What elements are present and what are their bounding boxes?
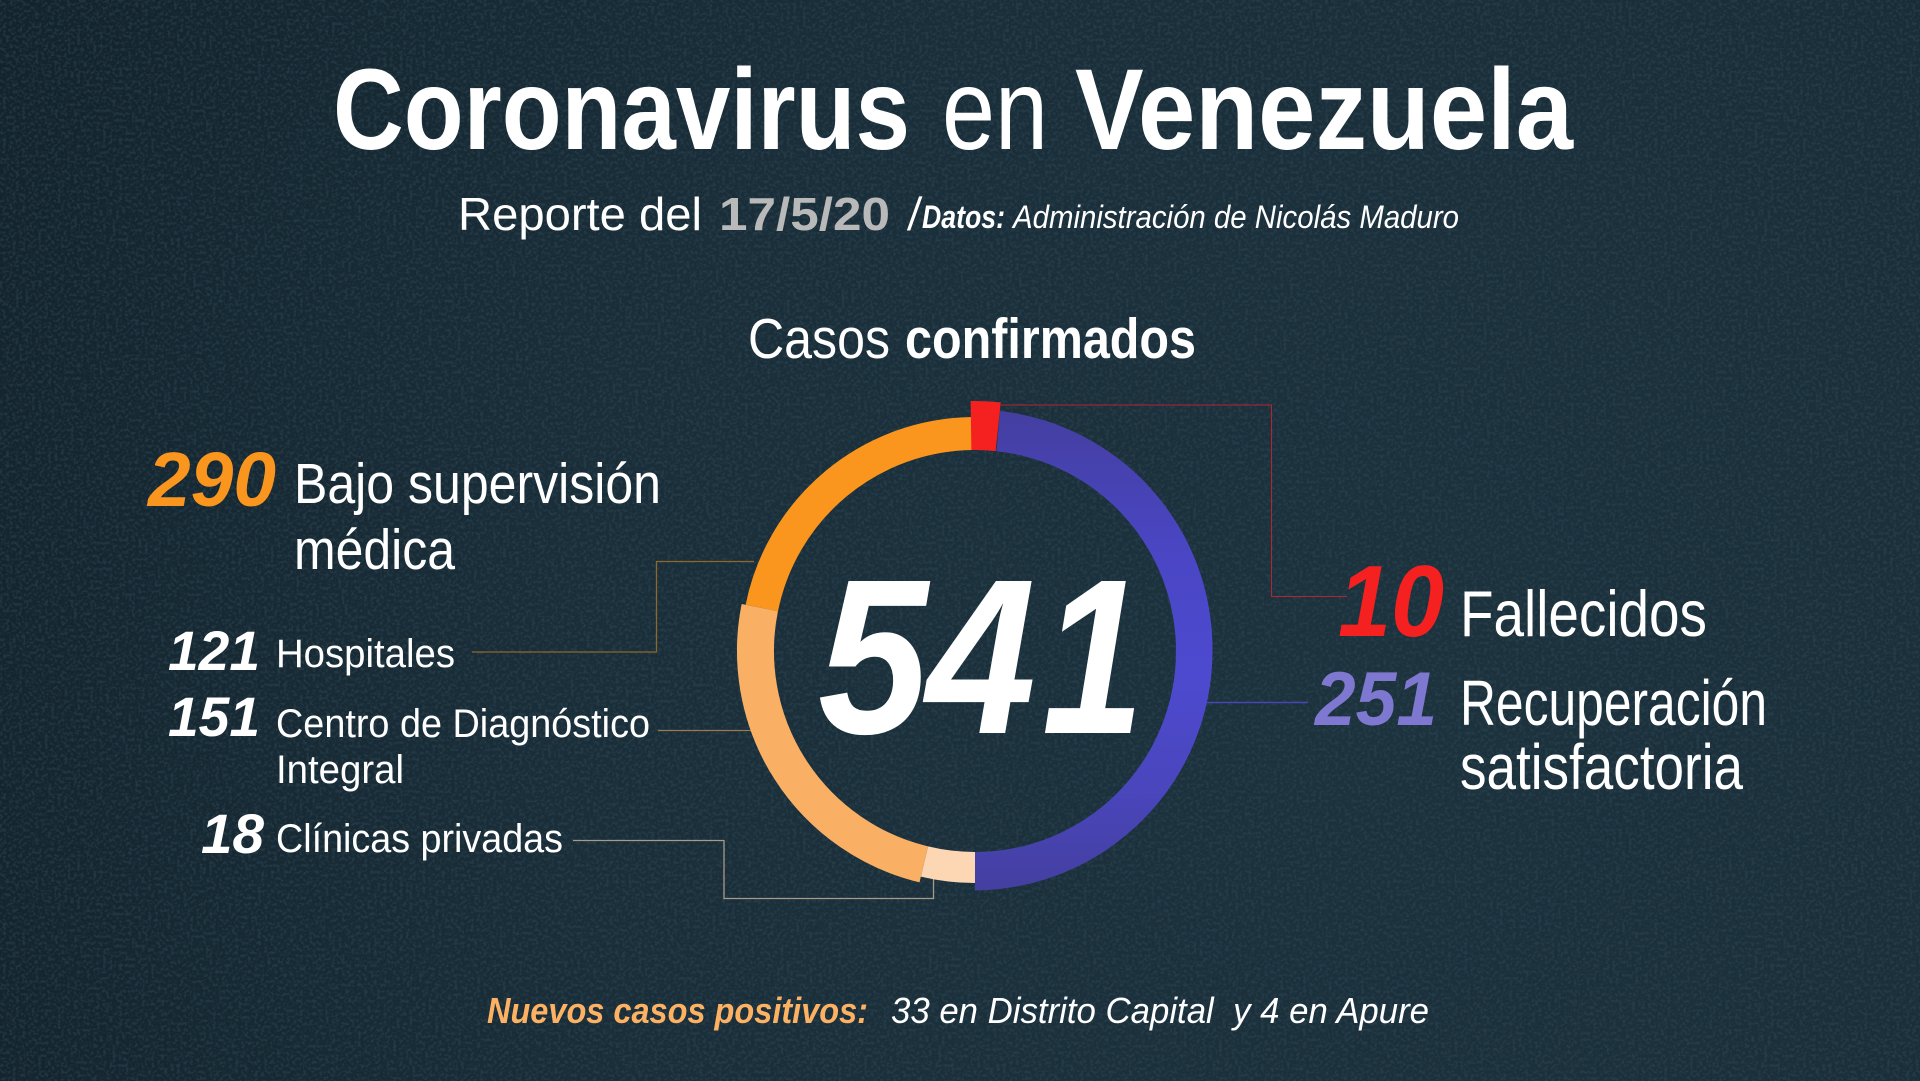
stat: 18 clínicas privadas: 18	[201, 802, 265, 865]
subtitle: report date and source: Reporte del	[458, 188, 702, 240]
stat: 290 bajo supervisión médica: Bajo supervisión	[294, 452, 661, 516]
stat: 121 hospitales	[168, 619, 455, 682]
stat: 290 bajo supervisión médica: médica	[294, 518, 455, 582]
stat: 121 hospitales: 121	[168, 619, 260, 682]
total: 541: 1	[1042, 533, 1144, 780]
stat: 10 fallecidos: 10	[1338, 546, 1444, 658]
stat: 151 centro de diagnóstico integral: 151	[168, 685, 260, 748]
segment: clínicas privadas	[924, 862, 975, 868]
stat: 121 hospitales: Hospitales	[276, 632, 455, 676]
footer: nuevos casos positivos: Nuevos casos positivos:	[487, 990, 868, 1031]
segment: recuperación 251	[975, 411, 1213, 890]
title	[333, 46, 1574, 174]
heading: casos confirmados	[748, 307, 1196, 370]
subtitle: report date and source: 17/5/20	[719, 188, 890, 240]
title: Venezuela	[1075, 46, 1574, 174]
segment: fallecidos 10	[971, 425, 998, 427]
stat: 18 clínicas privadas	[201, 802, 563, 865]
subtitle: report date and source	[458, 188, 1459, 240]
stat: 251 recuperación satisfactoria: satisfactoria	[1460, 731, 1743, 803]
subtitle: report date and source: Administración de Nicolás Maduro	[1011, 199, 1459, 235]
stat: 151 centro de diagnóstico integral: Integral	[276, 748, 404, 792]
connector: centro de diagnóstico	[658, 730, 752, 732]
stat: 10 fallecidos: Fallecidos	[1460, 577, 1707, 650]
stat: 10 fallecidos	[1338, 546, 1707, 658]
title: Coronavirus	[333, 46, 910, 174]
footer: nuevos casos positivos: 33 en Distrito Capital y 4 en Apure	[891, 990, 1429, 1031]
footer: nuevos casos positivos	[487, 990, 1429, 1031]
heading: casos confirmados: Casos	[748, 307, 890, 370]
segment: bajo supervisión 290	[762, 434, 972, 608]
heading: casos confirmados: confirmados	[905, 307, 1196, 370]
stat: 151 centro de diagnóstico integral: Centro de Diagnóstico	[276, 702, 650, 746]
stat: 251 recuperación satisfactoria	[1313, 657, 1767, 803]
stat: 251 recuperación satisfactoria: Recuperación	[1460, 667, 1767, 739]
stat: 18 clínicas privadas: Clínicas privadas	[276, 817, 563, 861]
connector: clínicas privadas	[573, 840, 934, 898]
connector: fallecidos	[1001, 405, 1347, 596]
stat: 290 bajo supervisión médica: 290	[146, 437, 276, 523]
segment: centros de diagnóstico y hospitales	[755, 608, 924, 864]
total: 541	[818, 533, 1144, 780]
stat: 251 recuperación satisfactoria: 251	[1313, 657, 1437, 742]
subtitle: report date and source: /	[906, 188, 923, 240]
title: en	[942, 46, 1048, 174]
stat: 290 bajo supervisión médica	[146, 437, 661, 582]
total: 541: 5	[818, 533, 931, 780]
connector: hospitales	[472, 562, 754, 652]
total: 541: 4	[922, 533, 1036, 780]
donut chart	[755, 411, 1213, 890]
connector: recuperación	[1206, 702, 1308, 704]
subtitle: report date and source: Datos:	[922, 199, 1005, 235]
stat: 151 centro de diagnóstico integral	[168, 685, 650, 792]
